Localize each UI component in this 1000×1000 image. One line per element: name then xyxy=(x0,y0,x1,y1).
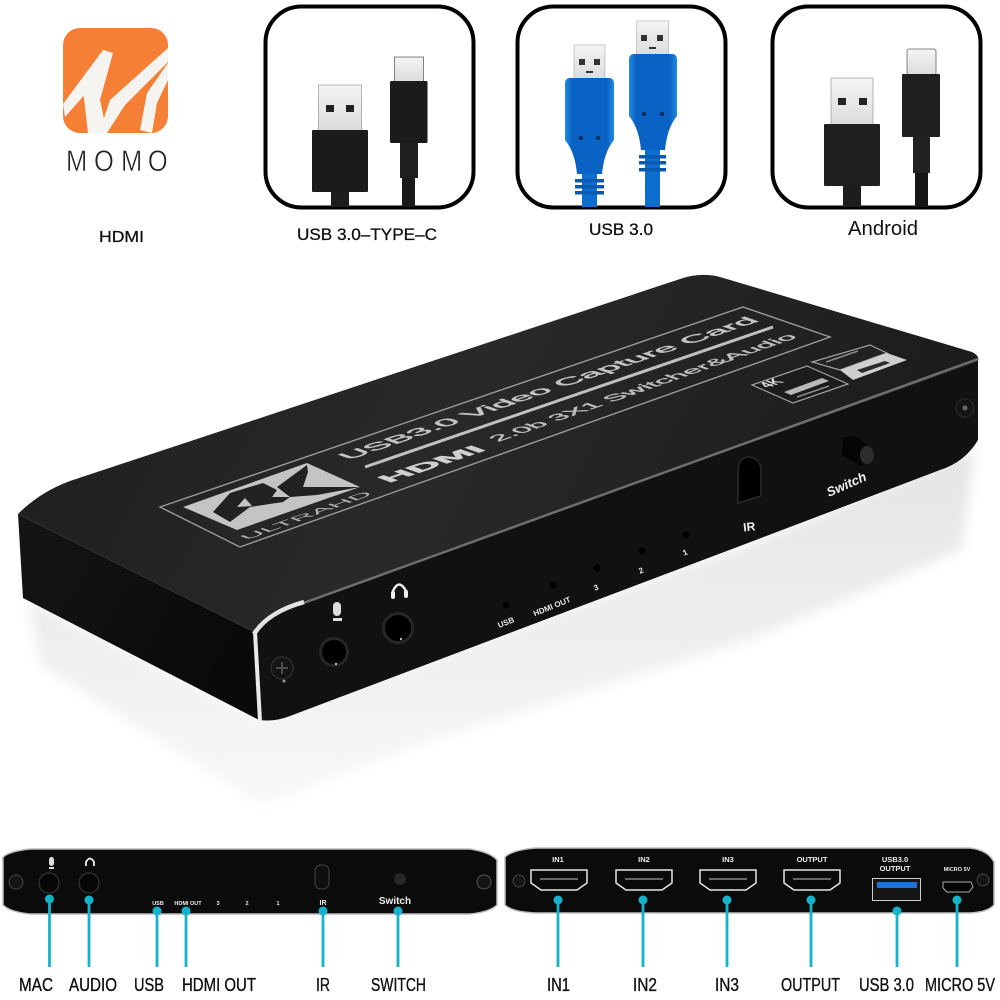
4K HDMI badge: 4K xyxy=(755,377,789,389)
front face xyxy=(254,361,978,720)
4K Ultra HD logo xyxy=(183,463,377,541)
logo: MOMO: MOMO xyxy=(66,144,168,177)
port labels: IN3 xyxy=(722,855,734,864)
logo: MOMO xyxy=(63,28,168,177)
icon: microphone xyxy=(333,602,342,621)
port labels xyxy=(552,855,971,873)
HDMI port IN1 xyxy=(531,870,587,890)
title frame on top surface xyxy=(160,307,830,547)
micro USB port xyxy=(943,882,973,892)
port labels: USB3.0 xyxy=(882,855,908,864)
card: USB 3.0 blue cables xyxy=(518,6,726,208)
switch button xyxy=(842,436,874,466)
callout labels: SWITCH xyxy=(371,975,426,995)
port labels: IN1 xyxy=(552,855,564,864)
front panel strip xyxy=(3,849,497,914)
mic icon xyxy=(49,857,54,869)
status LEDs and labels: USB xyxy=(497,615,516,630)
port labels: MICRO 5V xyxy=(944,867,971,873)
screw xyxy=(477,875,491,889)
port labels: IN2 xyxy=(638,855,650,864)
icon: headphones xyxy=(391,584,408,599)
caption: USB 3.0-TYPE-C: USB 3.0–TYPE–C xyxy=(297,225,437,244)
left plug xyxy=(565,45,614,207)
callout labels: MAC xyxy=(19,975,53,995)
IR window xyxy=(738,457,761,503)
caption: HDMI: HDMI xyxy=(99,229,144,246)
status LEDs and labels: 3 xyxy=(592,582,600,593)
card: Android micro USB cable xyxy=(772,6,980,208)
port labels: OUTPUT xyxy=(880,864,911,873)
HDMI port OUTPUT xyxy=(784,870,840,890)
caption: Android: Android xyxy=(848,218,918,240)
callout labels: IR xyxy=(316,975,330,995)
switch knob xyxy=(394,873,406,885)
port tongues xyxy=(540,878,831,880)
screw: front right xyxy=(956,399,974,417)
top front seam highlight xyxy=(298,359,978,605)
callout labels: AUDIO xyxy=(69,975,117,995)
mic jack xyxy=(39,873,59,893)
right plug xyxy=(629,21,677,207)
callout labels: USB xyxy=(134,975,164,995)
caption: USB 3.0: USB 3.0 xyxy=(589,221,653,239)
4K Ultra HD logo: ULTRAHD xyxy=(235,490,377,541)
callout labels: IN1 xyxy=(547,975,570,995)
status LEDs and labels xyxy=(497,532,690,630)
Switch label: Switch xyxy=(379,896,411,907)
audio jack xyxy=(79,873,99,893)
port labels: OUTPUT xyxy=(797,855,828,864)
audio jack: headphones xyxy=(384,614,412,642)
LED labels xyxy=(152,901,280,907)
LED labels: 3 xyxy=(216,901,220,907)
callout lines and dots xyxy=(45,894,962,967)
IR label: IR xyxy=(743,519,756,534)
printed title: USB3.0 Video Capture Card: USB3.0 Video Capture Card xyxy=(332,315,764,462)
printed subtitle: HDMI: HDMI xyxy=(371,443,492,485)
IR label: IR xyxy=(320,900,326,907)
status LEDs and labels: HDMI OUT xyxy=(532,595,572,618)
LED labels: USB xyxy=(152,901,164,907)
callout labels xyxy=(19,975,995,995)
HDMI port IN2 xyxy=(616,870,672,890)
status LEDs and labels: 2 xyxy=(637,565,645,576)
LED labels: 1 xyxy=(276,901,280,907)
main device: video capture card xyxy=(18,275,978,721)
callout labels: USB 3.0 xyxy=(859,975,914,995)
4K HDMI badge xyxy=(752,366,848,403)
top surface xyxy=(18,275,978,632)
HDMI port IN3 xyxy=(700,870,756,890)
callout labels: OUTPUT xyxy=(781,975,840,995)
IR slot xyxy=(315,865,329,889)
HDMI 2.0 badge xyxy=(812,345,907,380)
left side face xyxy=(18,514,259,720)
callout labels: IN2 xyxy=(633,975,657,995)
audio jack: mic xyxy=(320,638,348,666)
screw xyxy=(9,875,23,889)
LED labels: HDMI OUT xyxy=(174,901,202,907)
callout labels: IN3 xyxy=(715,975,739,995)
LED labels: 2 xyxy=(245,901,249,907)
headphones icon xyxy=(86,858,94,866)
back panel strip xyxy=(505,848,994,913)
card: USB 3.0 Type-C cable xyxy=(266,6,474,208)
USB 3.0 port xyxy=(872,878,920,900)
status LEDs and labels: 1 xyxy=(681,547,689,558)
Switch label: Switch xyxy=(824,469,869,500)
screw: front left xyxy=(271,657,293,682)
callout labels: HDMI OUT xyxy=(182,975,256,995)
printed subtitle: 2.0b 3X1 Switcher&Audio: 2.0b 3X1 Switcher&Audio xyxy=(484,332,803,443)
floor reflection xyxy=(28,450,975,805)
screws xyxy=(513,874,989,887)
